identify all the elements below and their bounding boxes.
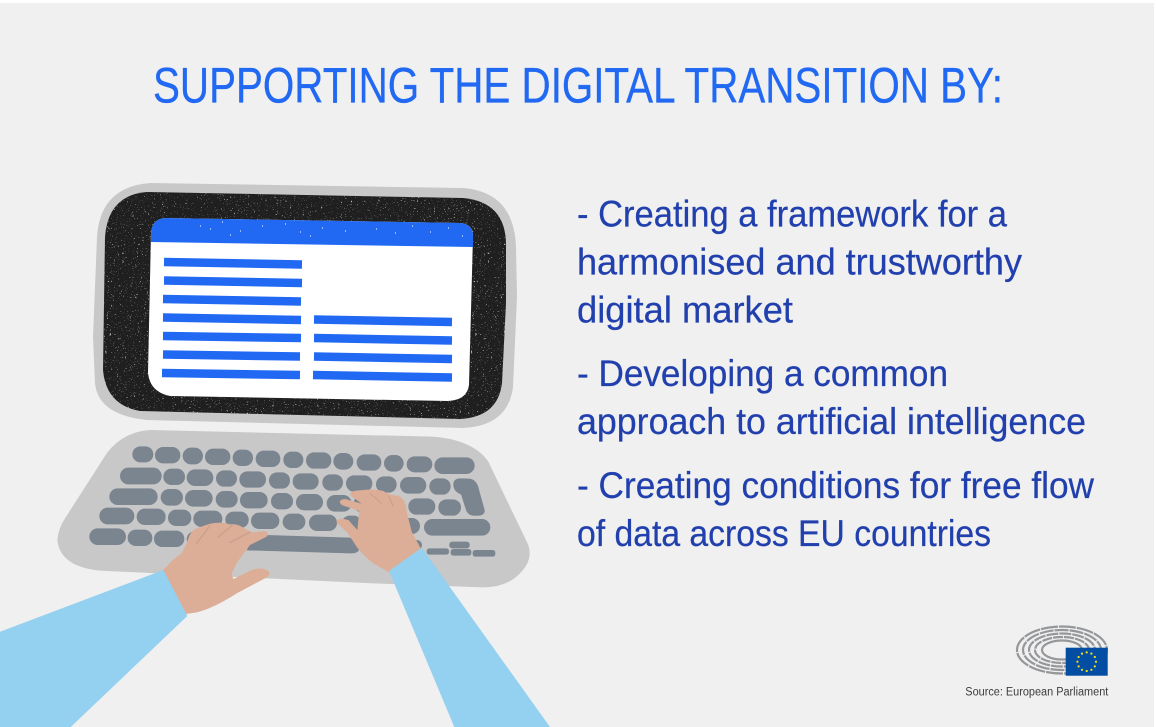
bullet 1 [577,194,1022,331]
bullet 1: - Creating a framework for a [577,194,1007,235]
right hand [336,489,423,575]
bullet 1: digital market [577,290,794,331]
screen text lines: right column [313,320,452,378]
left hand [157,523,269,615]
bullet 2: - Developing a common [577,353,948,394]
bullet 2: approach to artificial intelligence [577,401,1086,442]
keyboard [57,430,530,587]
illustration: laptop with hands [0,183,550,727]
hemicycle [1017,626,1107,674]
bullet 3: - Creating conditions for free flow [577,465,1094,506]
bullet 3: of data across EU countries [577,513,991,554]
bullet 3 [577,465,1094,554]
screen bezel [93,183,517,428]
right sleeve [389,548,550,727]
bullet list [577,194,1094,554]
EU flag [1066,648,1108,676]
left sleeve [0,570,187,727]
bullet 2 [577,353,1086,442]
bullet 1: harmonised and trustworthy [577,242,1022,283]
screen window [148,218,473,401]
screen text lines: left column [162,262,302,375]
source: Source: European Parliament [965,686,1109,698]
European Parliament logo [965,626,1109,698]
